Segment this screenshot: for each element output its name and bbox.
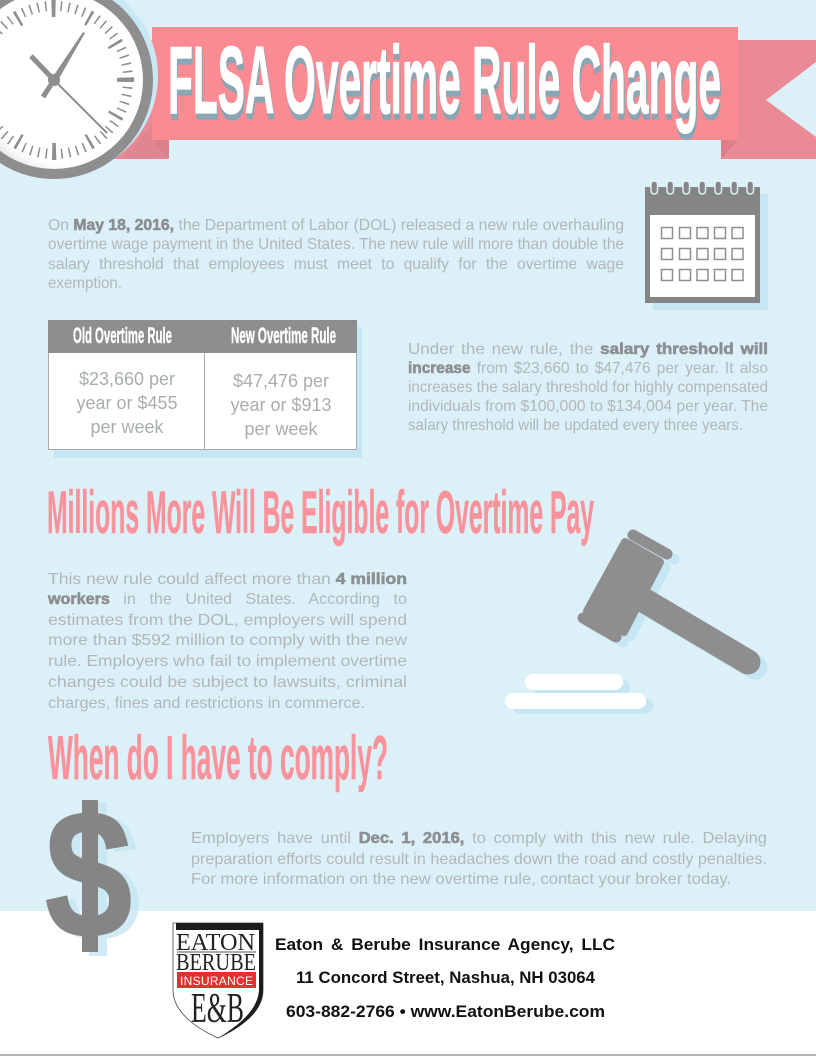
agency contact details: [275, 935, 615, 1021]
logo: Eaton and Berube shield: [173, 923, 263, 1038]
threshold paragraph: increase from $23,660 to $47,476 per year. It also: [408, 360, 768, 377]
agency contact details: 11 Concord Street, Nashua, NH 03064: [296, 968, 596, 987]
impact paragraph: workers in the United States. According to: [47, 591, 407, 608]
agency contact details: 603-882-2766 • www.EatonBerube.com: [286, 1002, 605, 1021]
icon: gavel: [505, 535, 755, 714]
old rule column: $23,660 per: [79, 369, 175, 389]
logo: Eaton and Berube shield: EATON: [176, 930, 255, 956]
footer band: [0, 911, 816, 1056]
compliance paragraph: For more information on the new overtime rule, contact your broker today.: [191, 871, 731, 888]
threshold paragraph: increases the salary threshold for highly compensated: [408, 379, 768, 396]
impact paragraph: estimates from the DOL, employers will spend: [48, 612, 407, 629]
logo: Eaton and Berube shield: INSURANCE: [180, 974, 253, 988]
threshold paragraph: salary threshold will be updated every three years.: [408, 417, 743, 434]
icon: dollar sign: $: [45, 772, 132, 976]
impact paragraph: This new rule could affect more than 4 million: [48, 571, 407, 588]
title ribbon: [100, 27, 816, 159]
threshold paragraph: individuals from $100,000 to $134,004 per year. The: [408, 398, 768, 415]
icon: calendar: [645, 181, 768, 310]
compliance paragraph: preparation efforts could result in headaches down the road and costly penalties.: [191, 851, 767, 868]
impact paragraph: [47, 571, 407, 712]
impact paragraph: changes could be subject to lawsuits, criminal: [48, 674, 407, 691]
gavel sound block: [505, 674, 653, 714]
impact paragraph: charges, fines and restrictions in commerce.: [48, 695, 365, 712]
new rule column: per week: [244, 419, 319, 439]
old rule column: [73, 323, 178, 437]
logo: Eaton and Berube shield: E&B: [191, 986, 244, 1032]
impact paragraph: more than $592 million to comply with the new: [48, 632, 407, 649]
old rule column: year or $455: [76, 393, 178, 413]
new rule column: New Overtime Rule: [231, 323, 336, 348]
threshold paragraph: [408, 341, 768, 434]
compliance paragraph: [191, 830, 767, 888]
intro paragraph: exemption.: [48, 275, 122, 292]
icon: clock: [0, 0, 169, 179]
new rule column: year or $913: [230, 395, 332, 415]
compliance paragraph: Employers have until Dec. 1, 2016, to comply with this new rule. Delaying: [191, 830, 767, 847]
icon: dollar sign: $: [53, 775, 140, 979]
threshold paragraph: Under the new rule, the salary threshold will: [408, 341, 768, 358]
intro paragraph: On May 18, 2016, the Department of Labor (DOL) released a new rule overhauling: [48, 217, 624, 234]
intro paragraph: overtime wage payment in the United States. The new rule will more than double the: [48, 236, 624, 253]
intro paragraph: [48, 217, 624, 292]
new rule column: $47,476 per: [233, 371, 329, 391]
impact paragraph: rule. Employers who fail to implement overtime: [48, 653, 407, 670]
old rule column: per week: [90, 417, 165, 437]
intro paragraph: salary threshold that employees must meet to qualify for the overtime wage: [48, 256, 624, 273]
logo: Eaton and Berube shield: BERUBE: [176, 950, 256, 976]
agency contact details: Eaton & Berube Insurance Agency, LLC: [275, 935, 615, 954]
comparison table: [48, 320, 362, 458]
old rule column: Old Overtime Rule: [73, 323, 172, 348]
new rule column: [230, 323, 336, 439]
